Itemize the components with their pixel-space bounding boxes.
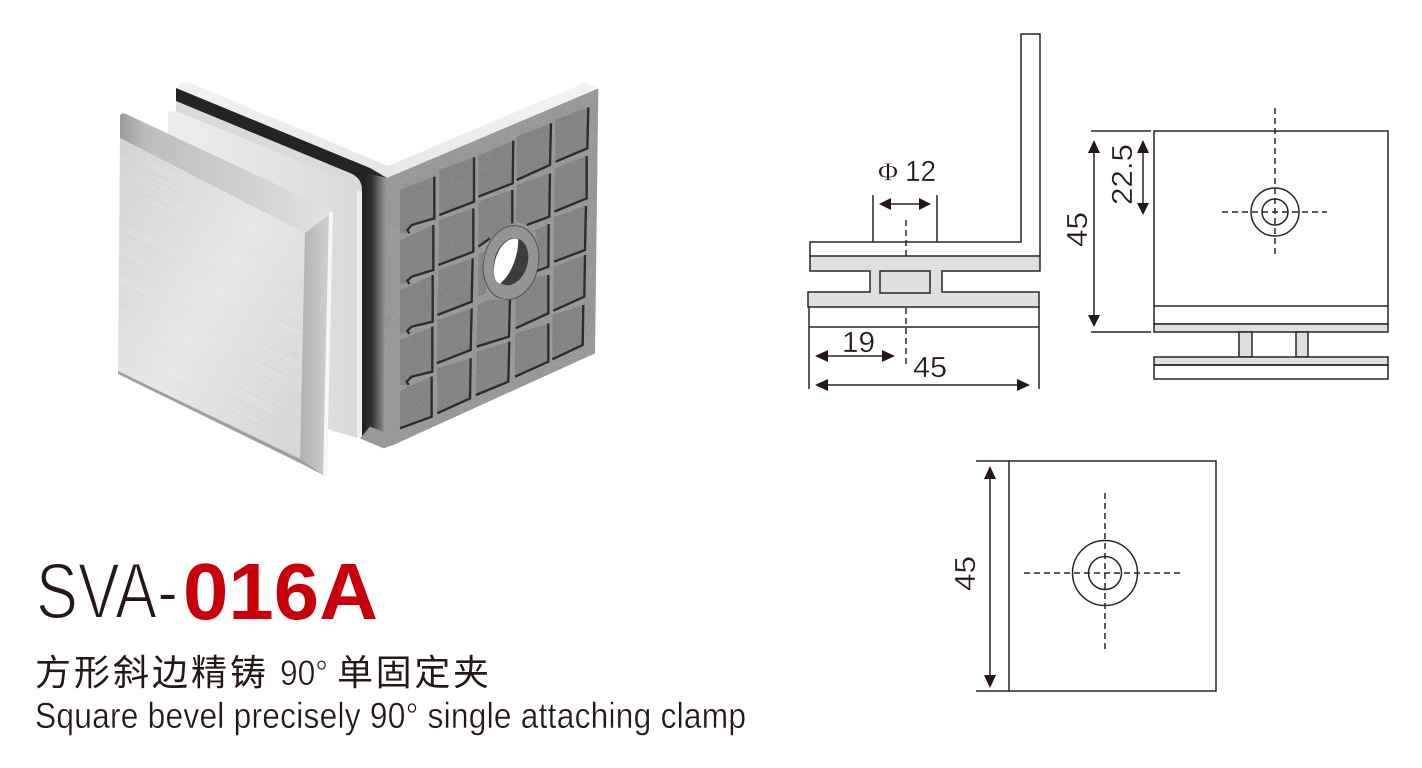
dimension: 22.5: 22.5	[1107, 144, 1139, 205]
chinese product name	[35, 652, 489, 693]
cast grid back plate	[360, 88, 598, 448]
drawing: front view	[1062, 108, 1388, 379]
dimension: 45	[1062, 140, 1100, 327]
dimension: diameter 12: Φ	[878, 159, 898, 186]
dimension: 45: 45	[950, 556, 982, 591]
L bracket outline	[810, 34, 1040, 256]
dimension: diameter 12	[878, 156, 936, 210]
extension lines	[976, 461, 1009, 691]
dimension: 22.5	[1107, 140, 1149, 215]
plate outline	[1009, 461, 1216, 691]
light layer behind pad	[176, 101, 362, 438]
dimension: 45	[815, 352, 1030, 391]
dimension: diameter 12: 12	[905, 156, 936, 188]
stand-off posts	[1239, 332, 1308, 357]
chinese product name: 单固定夹	[337, 652, 489, 693]
dimension: 45: 45	[1062, 212, 1094, 247]
dashed centre lines	[1222, 108, 1327, 256]
dark cell shadow edges	[400, 107, 588, 428]
top bevel	[120, 113, 333, 233]
title: model number	[36, 546, 378, 636]
dimension: 19: 19	[842, 327, 875, 359]
chinese product name: 90°	[280, 654, 328, 693]
recessed cells	[400, 107, 588, 428]
cast side radius	[362, 172, 387, 448]
drawing: side section view	[808, 34, 1040, 391]
grey H section	[808, 256, 1040, 307]
bottom edge	[118, 371, 325, 476]
mounting hole	[488, 234, 534, 289]
pad rim	[357, 190, 362, 438]
dimension: 45	[950, 466, 996, 688]
chinese product name: 方形斜边精铸	[35, 652, 266, 693]
lower plate outline and extension lines	[809, 195, 1039, 389]
dimension: 19	[815, 327, 895, 362]
dimension: 45: 45	[913, 352, 947, 384]
upper grey band	[1154, 324, 1388, 332]
product photo: glass clamp	[0, 66, 598, 532]
plate outline	[1154, 131, 1388, 324]
plate body	[360, 88, 598, 448]
white gasket pad	[168, 111, 357, 438]
dashed centre lines	[1024, 493, 1182, 651]
english product name: Square bevel precisely 90° single attaching clamp	[35, 696, 746, 736]
drawing: plate view	[950, 461, 1216, 691]
dashed centre line	[905, 220, 907, 366]
hub ring around hole	[477, 220, 545, 305]
hole circles	[1072, 540, 1138, 606]
top white frame edge	[176, 82, 598, 178]
front plate face	[0, 66, 428, 532]
title: model number: 016A	[183, 547, 378, 636]
dark inner channel	[176, 88, 387, 448]
front plate with bevels	[0, 66, 428, 532]
bright plate edge	[323, 212, 333, 477]
right bevel	[300, 212, 333, 477]
lower grey band	[1154, 357, 1388, 365]
centre grey block	[880, 271, 930, 293]
hole circles	[1251, 188, 1299, 236]
title: model number: SVA-	[36, 546, 178, 635]
extension lines	[1091, 131, 1151, 332]
